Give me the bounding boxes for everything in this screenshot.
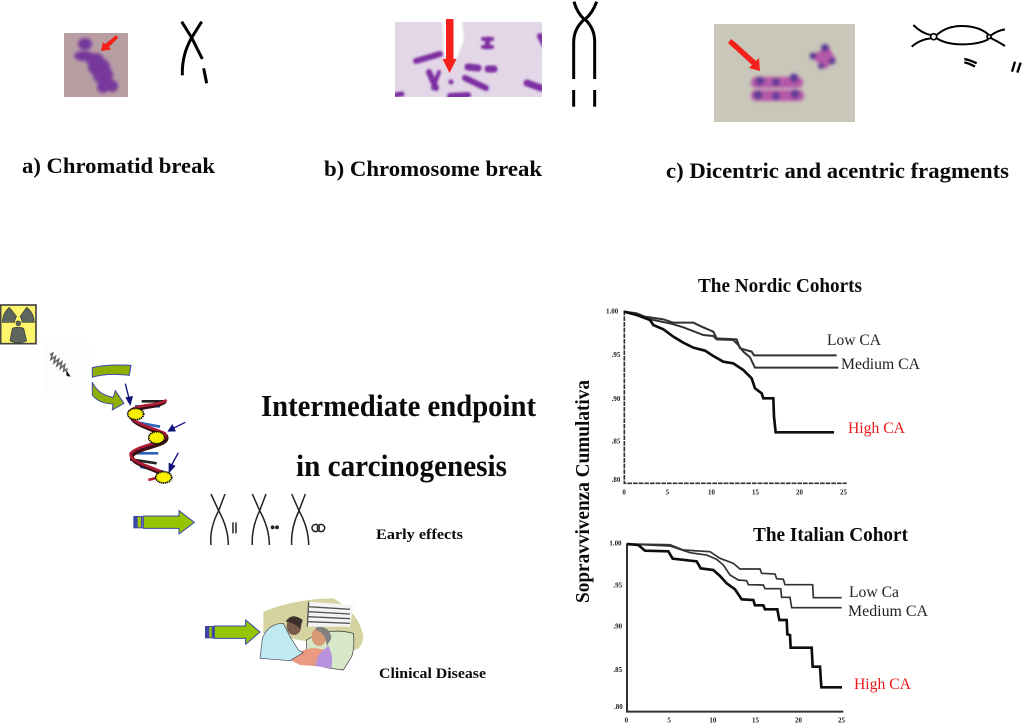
heading: c) Dicentric and acentric fragments: c) Dicentric and acentric fragments	[666, 158, 1009, 183]
tick labels: 15	[752, 488, 759, 496]
panel: dicentric micrograph	[714, 24, 855, 122]
medium CA curve	[624, 312, 838, 368]
icon: dicentric diagram	[912, 25, 1021, 73]
legend: High CA: High CA	[854, 676, 911, 693]
title: Intermediate endpoint in carcinogenesis: in carcinogenesis	[296, 448, 507, 483]
tick labels: 20	[796, 488, 803, 496]
chart: Italian cohort survival curves	[609, 539, 845, 725]
icon: red arrow	[728, 39, 760, 71]
arrow: curved green arrow	[92, 365, 131, 410]
legend: Medium CA: Medium CA	[841, 356, 920, 373]
tick labels: .85	[612, 438, 621, 446]
tick labels: .90	[612, 395, 621, 403]
medium CA curve	[627, 544, 842, 608]
arrow: green arrow to early effects	[133, 511, 194, 534]
tick labels: 1.00	[606, 308, 619, 316]
heading: a) Chromatid break: a) Chromatid break	[22, 153, 216, 178]
legend: Low Ca: Low Ca	[849, 584, 899, 601]
axis label: Sopravvivenza Cumulativa: Sopravvivenza Cumulativa	[572, 380, 594, 603]
tick labels: 10	[709, 717, 717, 725]
text: Early effects: Early effects	[376, 527, 463, 543]
icon: red arrow	[101, 35, 118, 51]
panel: chromatid break micrograph	[64, 33, 128, 97]
tick labels: 5	[666, 488, 670, 496]
tick labels: 20	[795, 717, 802, 725]
icon: DNA helix with damage	[125, 384, 185, 483]
icon: chromatid break diagram	[182, 22, 207, 83]
tick labels	[606, 308, 847, 496]
tick labels: .90	[613, 623, 623, 631]
icon: doctor and patient clip art	[260, 598, 363, 670]
tick labels: .95	[613, 582, 623, 590]
panel: chromosome break micrograph	[395, 19, 544, 97]
tick labels: 5	[667, 717, 671, 725]
arrow: green arrow to clinical disease	[205, 620, 260, 644]
legend: Low CA: Low CA	[827, 332, 881, 349]
low CA curve	[624, 312, 837, 355]
heading: The Italian Cohort: The Italian Cohort	[753, 524, 908, 546]
title: Intermediate endpoint in carcinogenesis: Intermediate endpoint	[261, 388, 537, 423]
chart: Nordic cohorts survival curves	[606, 308, 847, 496]
tick labels	[609, 539, 845, 725]
tick labels: .80	[612, 476, 621, 484]
icon: three chromosome aberrations	[211, 494, 325, 545]
high CA curve	[627, 544, 842, 687]
tick labels: 0	[625, 717, 629, 725]
icon: radiation wave	[44, 340, 89, 395]
text: Clinical Disease: Clinical Disease	[379, 666, 486, 682]
tick labels: .95	[612, 351, 621, 359]
axes	[627, 543, 843, 712]
heading: b) Chromosome break: b) Chromosome break	[324, 156, 543, 181]
helix rungs	[130, 401, 165, 472]
title: Intermediate endpoint in carcinogenesis	[261, 388, 537, 483]
icon: chromosome break diagram	[574, 2, 597, 107]
helix strands	[129, 400, 167, 480]
damage arrows	[125, 384, 185, 473]
legend: Medium CA: Medium CA	[848, 603, 928, 620]
axes	[624, 311, 847, 483]
tick labels: 0	[622, 488, 626, 496]
low CA curve	[627, 544, 842, 598]
damage stars	[128, 408, 172, 483]
icon: red arrow	[442, 19, 456, 73]
tick labels: .80	[614, 703, 623, 711]
tick labels: 25	[840, 488, 847, 496]
tick labels: 15	[752, 717, 759, 725]
high CA curve	[624, 312, 834, 432]
tick labels: 10	[708, 488, 715, 496]
icon: radiation sign	[1, 305, 36, 344]
heading: The Nordic Cohorts: The Nordic Cohorts	[698, 275, 862, 297]
tick labels: .85	[613, 666, 623, 674]
tick labels: 25	[838, 717, 845, 725]
tick labels: 1.00	[609, 539, 622, 547]
legend: High CA: High CA	[848, 420, 905, 437]
